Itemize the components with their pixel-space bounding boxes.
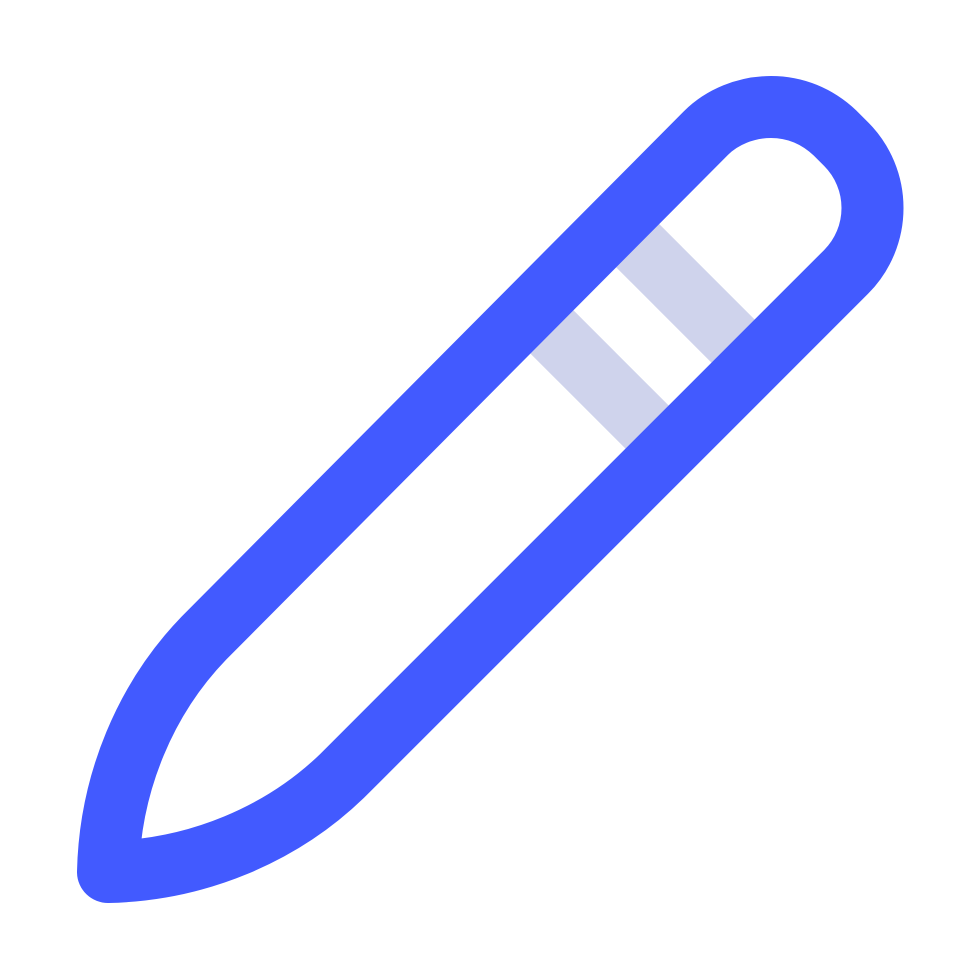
pen grip bands <box>540 233 745 440</box>
pen outline <box>108 107 872 872</box>
